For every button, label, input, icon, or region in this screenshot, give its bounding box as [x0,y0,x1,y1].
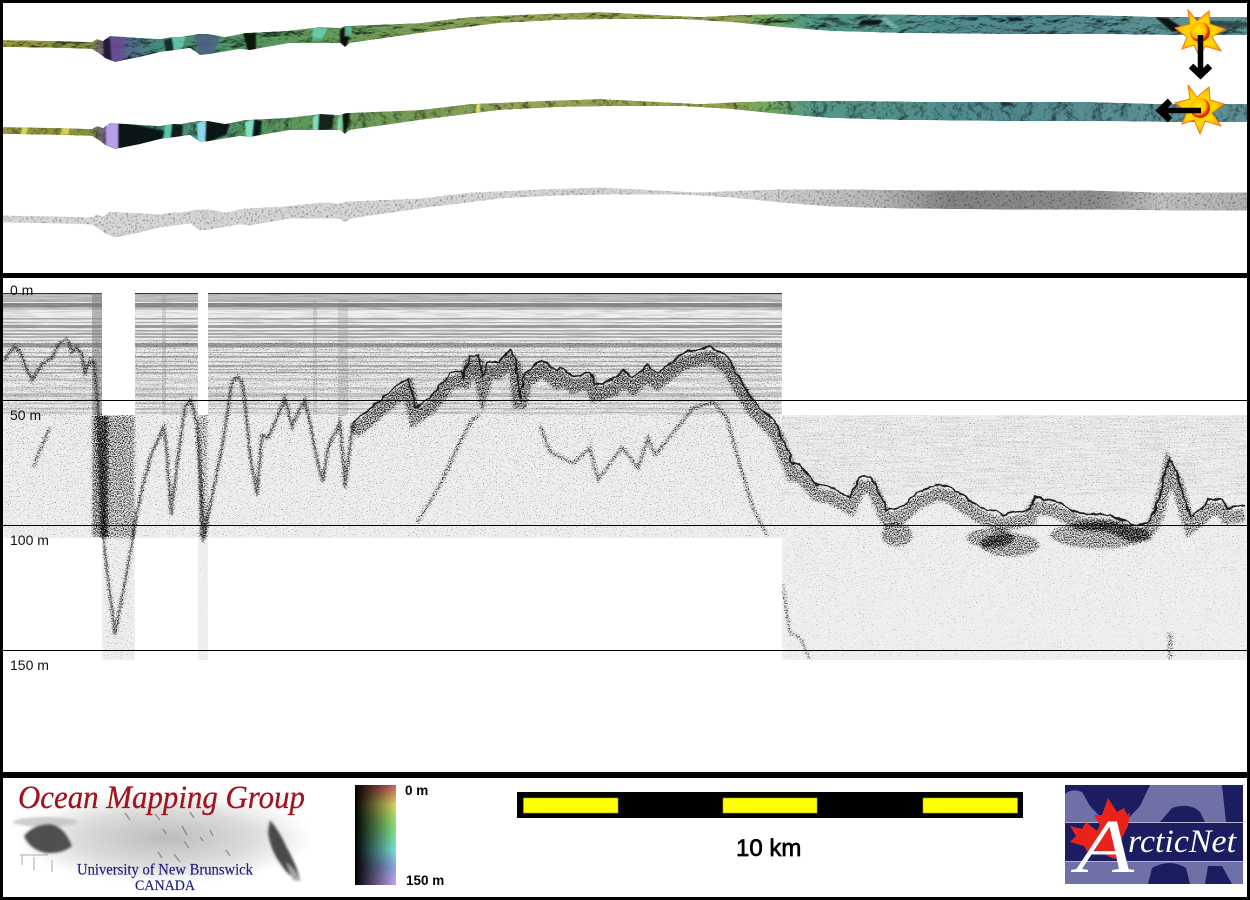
data background [3,293,1247,660]
wordmark: rcticNet [1128,824,1237,860]
scale bar [517,792,1023,862]
arrow: sun direction down [1191,35,1210,75]
panel: swath maps [3,12,1247,238]
faint streaks on right section [782,415,1247,495]
logo title: Ocean Mapping Group [18,780,305,816]
sonar targets on the seabed image [125,812,230,862]
legend label: 0 m: 0 m [405,783,428,798]
logo: Ocean Mapping Group [10,780,313,894]
depth label: 100 m: 100 m [10,532,49,548]
swath: grey backscatter mosaic [3,188,1247,238]
map land masses [1065,785,1243,884]
logo subtitle: university: University of New Brunswick [77,862,253,878]
legend label: 150 m: 150 m [406,873,444,888]
swath: colour shaded relief, sun from north [3,12,1247,64]
dark sonar shadow shape [268,820,301,881]
logo subtitle: country: CANADA [135,878,195,894]
arrow: sun direction left [1160,101,1201,120]
icon: maple leaf [1070,798,1130,860]
wreck debris trace [20,855,52,872]
icon: explosion marker, upper [1175,10,1225,58]
horizontal noise streaks [3,293,782,415]
scale bar label: 10 km [736,835,801,862]
logo: ArcticNet [1065,785,1243,889]
dark scallop shape [13,817,77,853]
icon: explosion marker, lower [1175,85,1224,134]
swath: colour shaded relief, sun from east [3,99,1247,149]
depth gridlines [3,400,1247,650]
legend: depth colour scale [355,783,444,888]
water column banding [3,293,782,415]
depth label: 50 m: 50 m [10,407,41,423]
depth label: 150 m: 150 m [10,657,49,673]
seabed reflector, main section [353,347,1245,525]
large letter A: A [1070,805,1135,889]
seabed reflector, left rugged section [3,337,353,635]
depth label: 0 m: 0 m [10,282,33,298]
speckle scatter [3,337,1247,660]
panel: seismic reflection profile [3,282,1247,673]
map band lines [1065,822,1243,823]
